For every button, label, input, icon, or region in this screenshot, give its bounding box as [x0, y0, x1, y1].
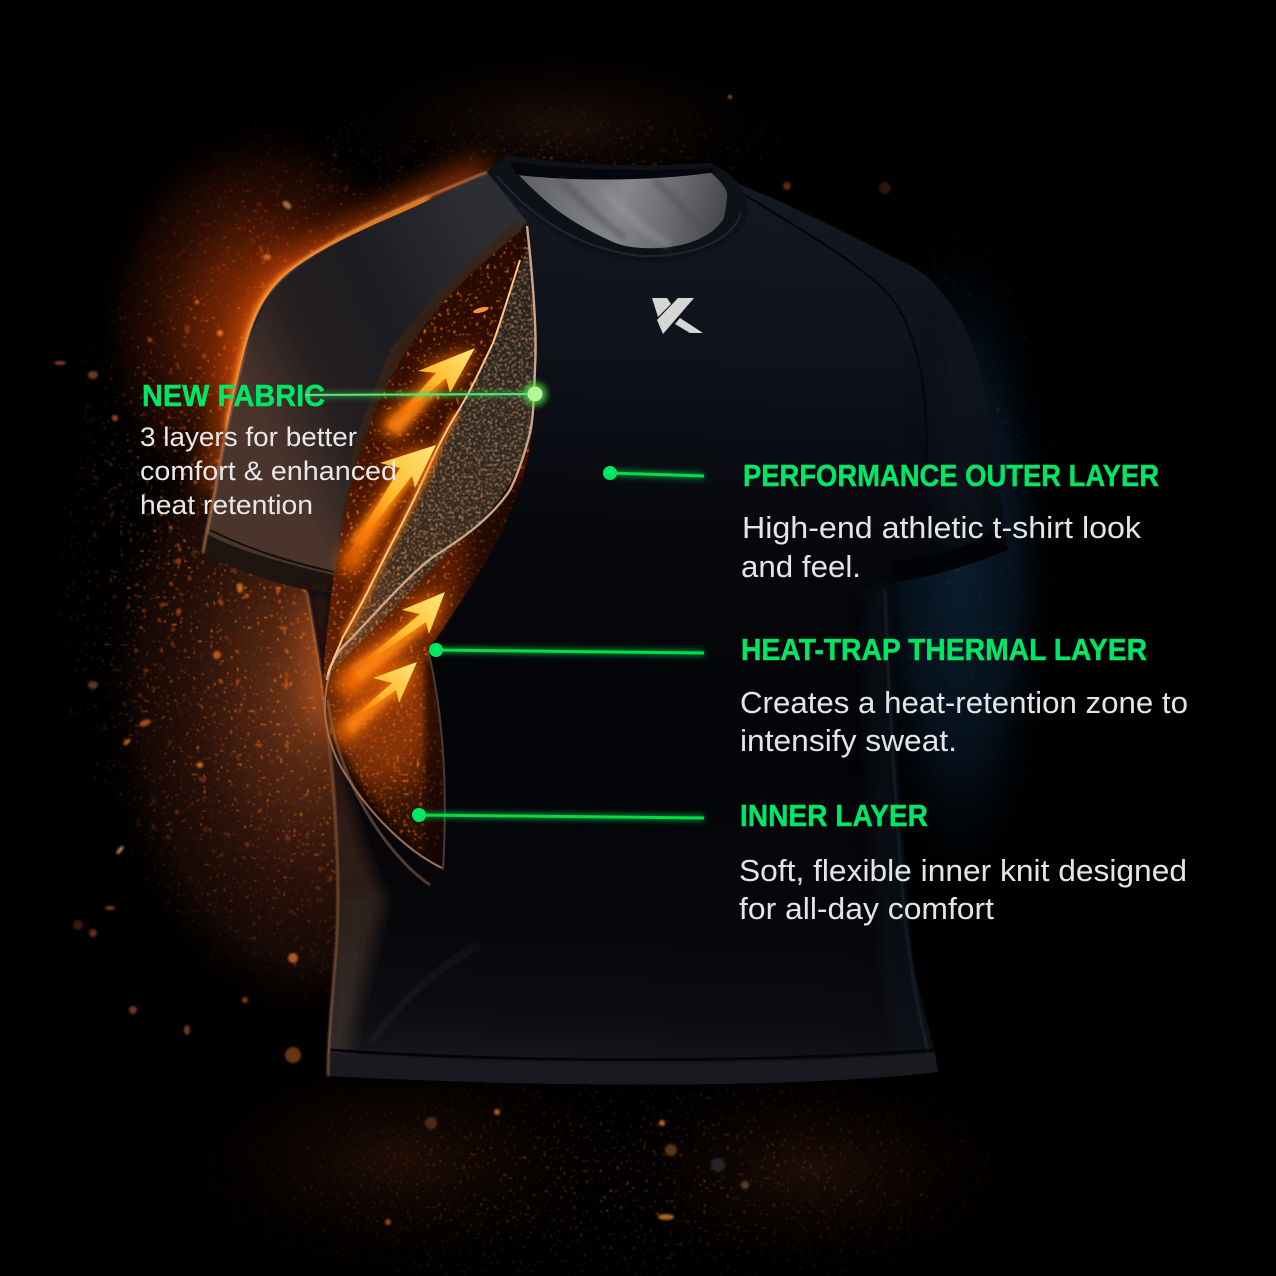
t-shirt — [203, 155, 1008, 1095]
description: new fabric: 3 layers for better — [140, 422, 357, 452]
description: thermal — [740, 685, 1188, 758]
sleeve hem underside — [203, 533, 334, 592]
description: thermal: Creates a heat-retention zone to — [740, 685, 1188, 720]
cutaway: thermal layer — [324, 227, 532, 886]
flap inner glow — [343, 413, 457, 637]
description: inner — [739, 853, 1187, 926]
right raglan seam — [745, 195, 927, 480]
left sleeve panel — [203, 172, 527, 590]
ragged seam strip — [338, 220, 523, 540]
description: new fabric — [140, 422, 397, 520]
shirt body — [203, 155, 1008, 1085]
logo — [652, 298, 703, 334]
callout: heat-trap thermal layer — [429, 632, 1188, 758]
callout: new fabric — [140, 378, 547, 520]
description: new fabric: comfort & enhanced — [140, 456, 397, 486]
rim highlight — [203, 172, 487, 553]
description: outer: and feel. — [741, 549, 861, 584]
heading: outer: PERFORMANCE OUTER LAYER — [743, 458, 1159, 493]
leader line: thermal — [429, 643, 704, 657]
right navy shading — [954, 477, 976, 531]
flap outer seam — [327, 226, 536, 680]
ember particles — [52, 94, 1047, 1276]
description: inner: Soft, flexible inner knit designed — [739, 853, 1187, 888]
description: new fabric: heat retention — [140, 490, 313, 520]
callout: performance outer layer — [603, 458, 1159, 584]
heading: inner: INNER LAYER — [740, 798, 928, 833]
hem band — [328, 1052, 938, 1077]
flap inner bright edge — [328, 260, 520, 675]
right side blue streak — [885, 590, 928, 1050]
leader line: new fabric — [305, 382, 547, 406]
leader line: outer — [603, 466, 704, 480]
shoulder fire glow — [215, 172, 487, 730]
cut edge stroke — [325, 672, 442, 868]
arrow streaks — [345, 374, 446, 734]
description: outer — [741, 510, 1142, 584]
sleeve hem — [210, 530, 334, 572]
lit left body panel — [307, 590, 385, 1080]
arrow glows — [335, 348, 475, 745]
callout: inner layer — [412, 798, 1187, 926]
description: thermal: intensify sweat. — [740, 723, 957, 758]
description: outer: High-end athletic t-shirt look — [742, 510, 1142, 545]
heading: new fabric: NEW FABRIC — [142, 378, 325, 413]
collar — [487, 155, 748, 263]
description: inner: for all-day comfort — [739, 891, 994, 926]
cutaway: outer layer flap — [325, 226, 540, 680]
leader line: inner — [412, 808, 704, 822]
heat arrows — [335, 348, 475, 745]
heading: thermal: HEAT-TRAP THERMAL LAYER — [741, 632, 1147, 667]
